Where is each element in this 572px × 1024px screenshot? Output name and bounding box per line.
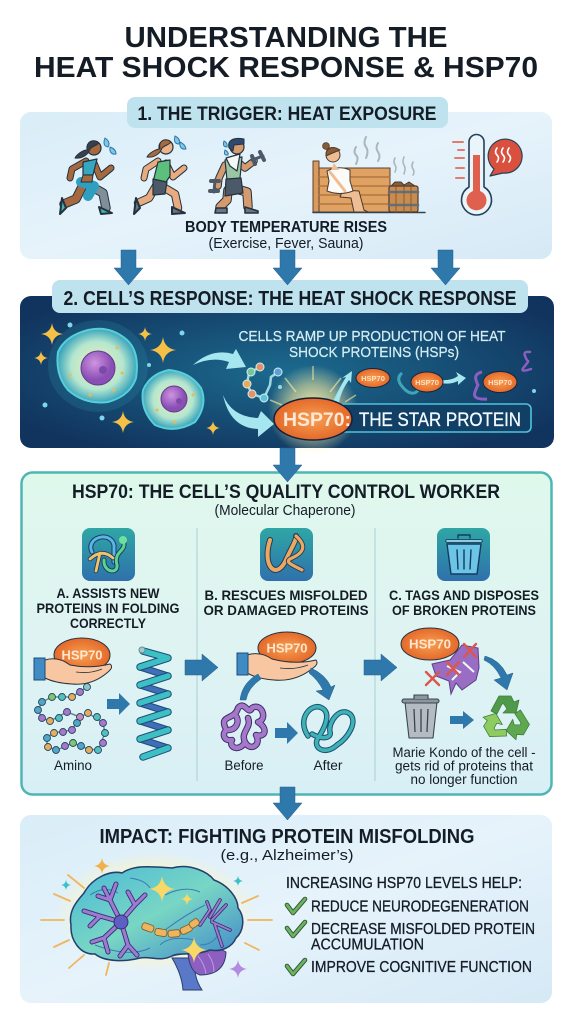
arrow: A to B: [185, 654, 218, 681]
arrow: worker to impact: [273, 787, 302, 820]
text: heading A: CORRECTLY: [70, 615, 147, 631]
heading: impact: IMPACT: FIGHTING PROTEIN MISFOLDING: [100, 826, 474, 848]
title: HEAT SHOCK RESPONSE & HSP70: [34, 52, 538, 84]
text: body temperature rises: [185, 219, 387, 252]
icon: tangled protein before: [224, 706, 265, 748]
text: heading B: OR DAMAGED PROTEINS: [204, 602, 368, 618]
title: [34, 22, 538, 84]
text: Marie Kondo caption: gets rid of proteins that: [395, 758, 533, 774]
arrow: rescue curves: [240, 668, 335, 700]
text: benefits list: [286, 875, 535, 976]
icon: hand holding HSP70: HSP70: [266, 640, 308, 656]
heading: cell's response: 2. CELL’S RESPONSE: THE HEAT SHOCK RESPONSE: [64, 288, 516, 310]
arrow: trigger to response left: [114, 250, 143, 285]
icon: amino acid chain: [34, 684, 108, 754]
icon: grey trash can: [402, 695, 439, 738]
list item: improve cognitive function: IMPROVE COGNITIVE FUNCTION: [311, 959, 532, 976]
arrow: lower curved: [223, 395, 274, 437]
callout: HSP70 the star protein: HSP70:: [283, 410, 351, 431]
icon: protein chain: [243, 363, 282, 402]
text: heading B: B. RESCUES MISFOLDED: [204, 587, 368, 603]
heading: the trigger: 1. THE TRIGGER: HEAT EXPOSURE: [138, 104, 436, 125]
icon: folded protein after: [304, 707, 353, 750]
callout: HSP70 the star protein: THE STAR PROTEIN: [359, 410, 521, 431]
heading: the trigger: [127, 97, 448, 128]
icon: recycle symbol: [480, 696, 533, 743]
icon: female runner with teal outfit: [60, 138, 116, 214]
panel: cell response: [20, 280, 554, 455]
icon: hand holding HSP70: [34, 638, 112, 684]
text: heading C: [389, 587, 539, 618]
text: benefits list: INCREASING HSP70 LEVELS HELP:: [286, 875, 522, 892]
chart: small HSP70 proteins: [356, 352, 531, 399]
icon: glowing cells: [48, 320, 203, 429]
list item: decrease misfolded protein accumulation: DECREASE MISFOLDED PROTEIN: [311, 921, 535, 938]
callout: HSP70 the star protein: [268, 365, 531, 455]
arrow: to recycling: [484, 656, 513, 690]
list item: reduce neurodegeneration: REDUCE NEURODEGENERATION: [311, 898, 529, 916]
panel: quality control worker: [22, 472, 552, 794]
chart: small HSP70 proteins: HSP70: [488, 378, 512, 387]
panel: trigger: [20, 97, 552, 259]
chart: small HSP70 proteins: HSP70: [361, 374, 385, 383]
icon: alpha helix: [139, 647, 168, 757]
text: heading A: PROTEINS IN FOLDING: [36, 600, 180, 616]
text: Marie Kondo caption: Marie Kondo of the cell -: [392, 745, 536, 760]
column B: rescues misfolded proteins: [204, 528, 368, 773]
icon: misfolded protein: [260, 528, 313, 581]
icon: thermometer with heat bubble: [453, 134, 522, 215]
arrow: trash to recycle: [450, 711, 474, 729]
arrow: response to worker: [273, 448, 302, 482]
icon: glowing brain with neuron: [41, 852, 272, 990]
label: amino: Amino: [54, 758, 92, 773]
icon: man lifting dumbbells: [210, 138, 264, 213]
column A: assists new proteins: [34, 528, 180, 773]
icon: trash can tile: [437, 528, 490, 581]
list item: decrease misfolded protein accumulation: [287, 921, 535, 954]
text: cells ramp up: CELLS RAMP UP PRODUCTION OF HEAT: [238, 328, 506, 345]
heading: impact: (e.g., Alzheimer’s): [220, 847, 354, 864]
icon: broken protein tagged by HSP70: HSP70: [409, 636, 451, 652]
arrow: trigger to response right: [431, 250, 460, 285]
heading: impact: [100, 826, 474, 864]
text: heading A: A. ASSISTS NEW: [56, 585, 160, 601]
text: cells ramp up: [238, 328, 506, 361]
icon: hand holding HSP70: HSP70: [62, 648, 102, 662]
icon: female runner with green top: [134, 136, 186, 214]
heading: cell's response: [52, 280, 528, 313]
icon: hand holding HSP70: [237, 632, 317, 680]
label: after: After: [314, 758, 343, 773]
arrow: before to after: [275, 722, 298, 744]
text: Marie Kondo caption: no longer function: [410, 772, 518, 787]
text: heading B: [204, 587, 368, 618]
text: heading A: [36, 585, 180, 631]
heading: quality control worker: [72, 482, 500, 519]
icon: sparkles: [34, 322, 536, 435]
text: body temperature rises: BODY TEMPERATURE RISES: [185, 219, 387, 236]
title: UNDERSTANDING THE: [124, 22, 448, 54]
text: Marie Kondo caption: [392, 745, 536, 787]
heading: quality control worker: (Molecular Chaperone): [214, 502, 356, 519]
text: heading C: OF BROKEN PROTEINS: [392, 602, 536, 618]
list item: decrease misfolded protein accumulation: ACCUMULATION: [311, 936, 424, 954]
icon: broken protein tagged by HSP70: [401, 628, 479, 694]
heading: quality control worker: HSP70: THE CELL’S QUALITY CONTROL WORKER: [72, 482, 500, 503]
panel: impact: [20, 815, 552, 1003]
arrow: upper curved: [193, 349, 246, 369]
icon: folding protein: [82, 528, 135, 581]
column C: tags and disposes: [389, 528, 539, 787]
chart: small HSP70 proteins: HSP70: [415, 378, 439, 387]
label: before: Before: [224, 758, 264, 773]
arrow: B to C: [364, 654, 397, 681]
text: heading C: C. TAGS AND DISPOSES: [389, 587, 539, 603]
arrow: chain to helix: [107, 693, 130, 715]
icon: sauna: [313, 137, 425, 212]
text: cells ramp up: SHOCK PROTEINS (HSPs): [289, 344, 459, 361]
text: body temperature rises: (Exercise, Fever, Sauna): [208, 236, 364, 252]
arrow: trigger to response middle: [273, 250, 302, 285]
